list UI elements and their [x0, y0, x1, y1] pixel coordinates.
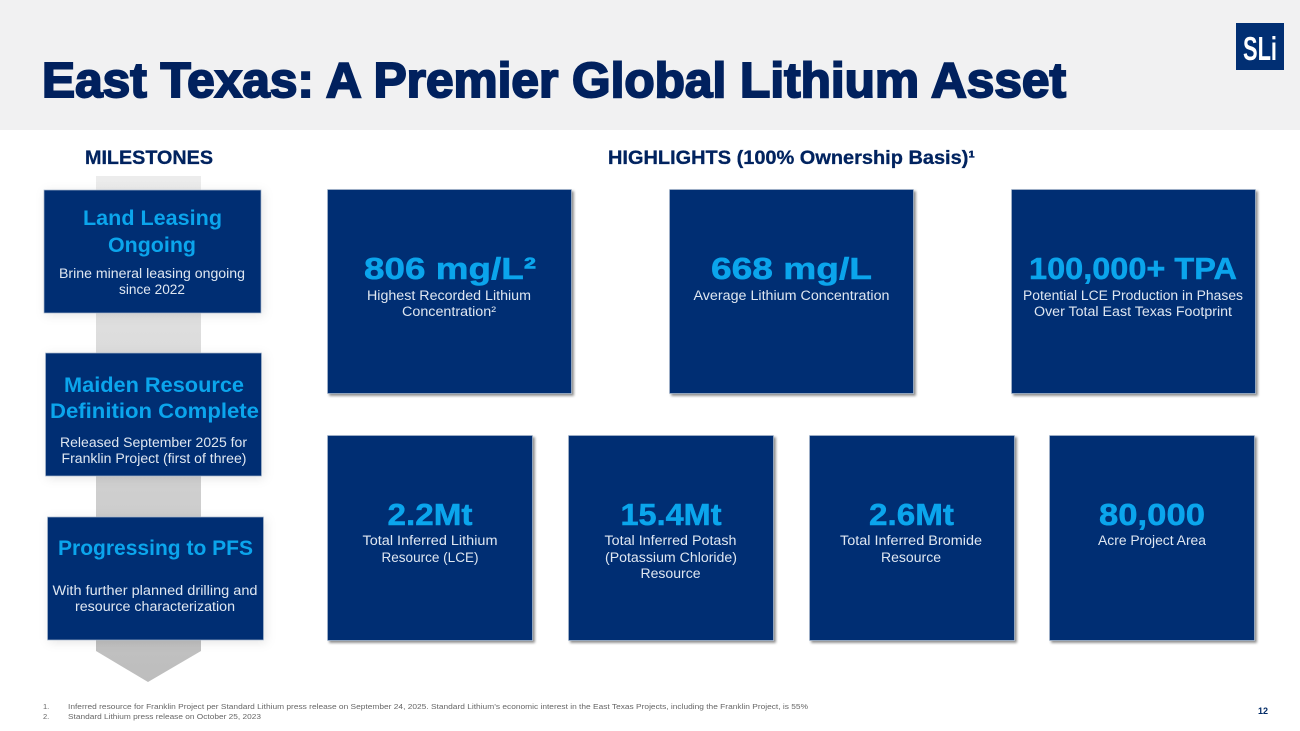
panel: total inferred potash: Resource	[640, 566, 700, 581]
panel: acre project area	[1050, 436, 1254, 640]
panel: total inferred potash: 15.4Mt	[620, 497, 722, 532]
arrow: milestone progression	[96, 176, 201, 682]
header band	[0, 0, 1300, 130]
panel: potential production: 100,000+ TPA	[1029, 251, 1237, 286]
panel: progressing to PFS milestone: With further planned drilling and	[52, 583, 258, 598]
panel: maiden resource milestone: Maiden Resource	[64, 374, 244, 397]
panel: total inferred bromide: Total Inferred Bromide	[840, 533, 982, 548]
heading: milestones: MILESTONES	[85, 148, 213, 169]
panel: average lithium concentration	[670, 190, 914, 394]
panel: total inferred lithium: Total Inferred Lithium	[362, 533, 498, 548]
footnotes: 2.	[43, 712, 49, 721]
panel: total inferred lithium: 2.2Mt	[388, 497, 472, 532]
footnotes	[43, 702, 808, 721]
heading: highlights: HIGHLIGHTS (100% Ownership Basis)¹	[608, 148, 975, 169]
panel: land leasing milestone: Ongoing	[108, 234, 196, 257]
panel: land leasing milestone: since 2022	[119, 282, 185, 297]
title: East Texas: A Premier Global Lithium Asset	[42, 54, 1066, 108]
panel: acre project area: 80,000	[1099, 497, 1205, 532]
panel: total inferred potash: (Potassium Chloride)	[605, 550, 737, 565]
panel: progressing to PFS milestone: resource characterization	[75, 599, 235, 614]
panel: progressing to PFS milestone: Progressing to PFS	[58, 537, 253, 560]
panel: total inferred bromide: Resource	[881, 550, 941, 565]
panel: total inferred potash: Total Inferred Potash	[604, 533, 736, 548]
icon: SLI logo	[1236, 23, 1284, 70]
panel: total inferred lithium: Resource (LCE)	[382, 550, 478, 565]
panel: average lithium concentration: Average Lithium Concentration	[694, 288, 890, 303]
panel: maiden resource milestone	[46, 353, 262, 476]
panel: total inferred potash	[568, 436, 774, 640]
panel: maiden resource milestone: Released September 2025 for	[60, 435, 248, 450]
panel: land leasing milestone: Land Leasing	[83, 207, 222, 230]
panel: highest lithium concentration	[328, 190, 572, 394]
panel: average lithium concentration: 668 mg/L	[711, 251, 872, 286]
panel: total inferred bromide	[810, 436, 1014, 640]
footnotes: Standard Lithium press release on October 25, 2023	[68, 712, 261, 721]
panel: highest lithium concentration: Concentration²	[402, 304, 497, 319]
panel: potential production: Over Total East Texas Footprint	[1034, 304, 1232, 319]
icon: SLI logo: SLi	[1243, 30, 1277, 67]
panel: potential production	[1012, 190, 1256, 394]
footnotes: 1.	[43, 702, 49, 711]
panel: highest lithium concentration: 806 mg/L²	[364, 251, 536, 286]
page number: 12	[1258, 706, 1268, 716]
panel: highest lithium concentration: Highest Recorded Lithium	[367, 288, 531, 303]
panel: total inferred lithium	[328, 436, 532, 640]
panel: maiden resource milestone: Franklin Project (first of three)	[62, 451, 247, 466]
panel: progressing to PFS milestone	[48, 517, 264, 640]
panel: acre project area: Acre Project Area	[1098, 533, 1207, 548]
panel: potential production: Potential LCE Production in Phases	[1023, 288, 1243, 303]
panel: land leasing milestone	[44, 190, 261, 313]
panel: total inferred bromide: 2.6Mt	[869, 497, 954, 532]
panel: land leasing milestone: Brine mineral leasing ongoing	[59, 266, 245, 281]
footnotes: Inferred resource for Franklin Project per Standard Lithium press release on September 24, 2025. Standard Lithium’s economic interest in the East Texas Projects, including the Franklin Project, is 55%	[68, 702, 808, 711]
panel: maiden resource milestone: Definition Complete	[50, 400, 259, 423]
